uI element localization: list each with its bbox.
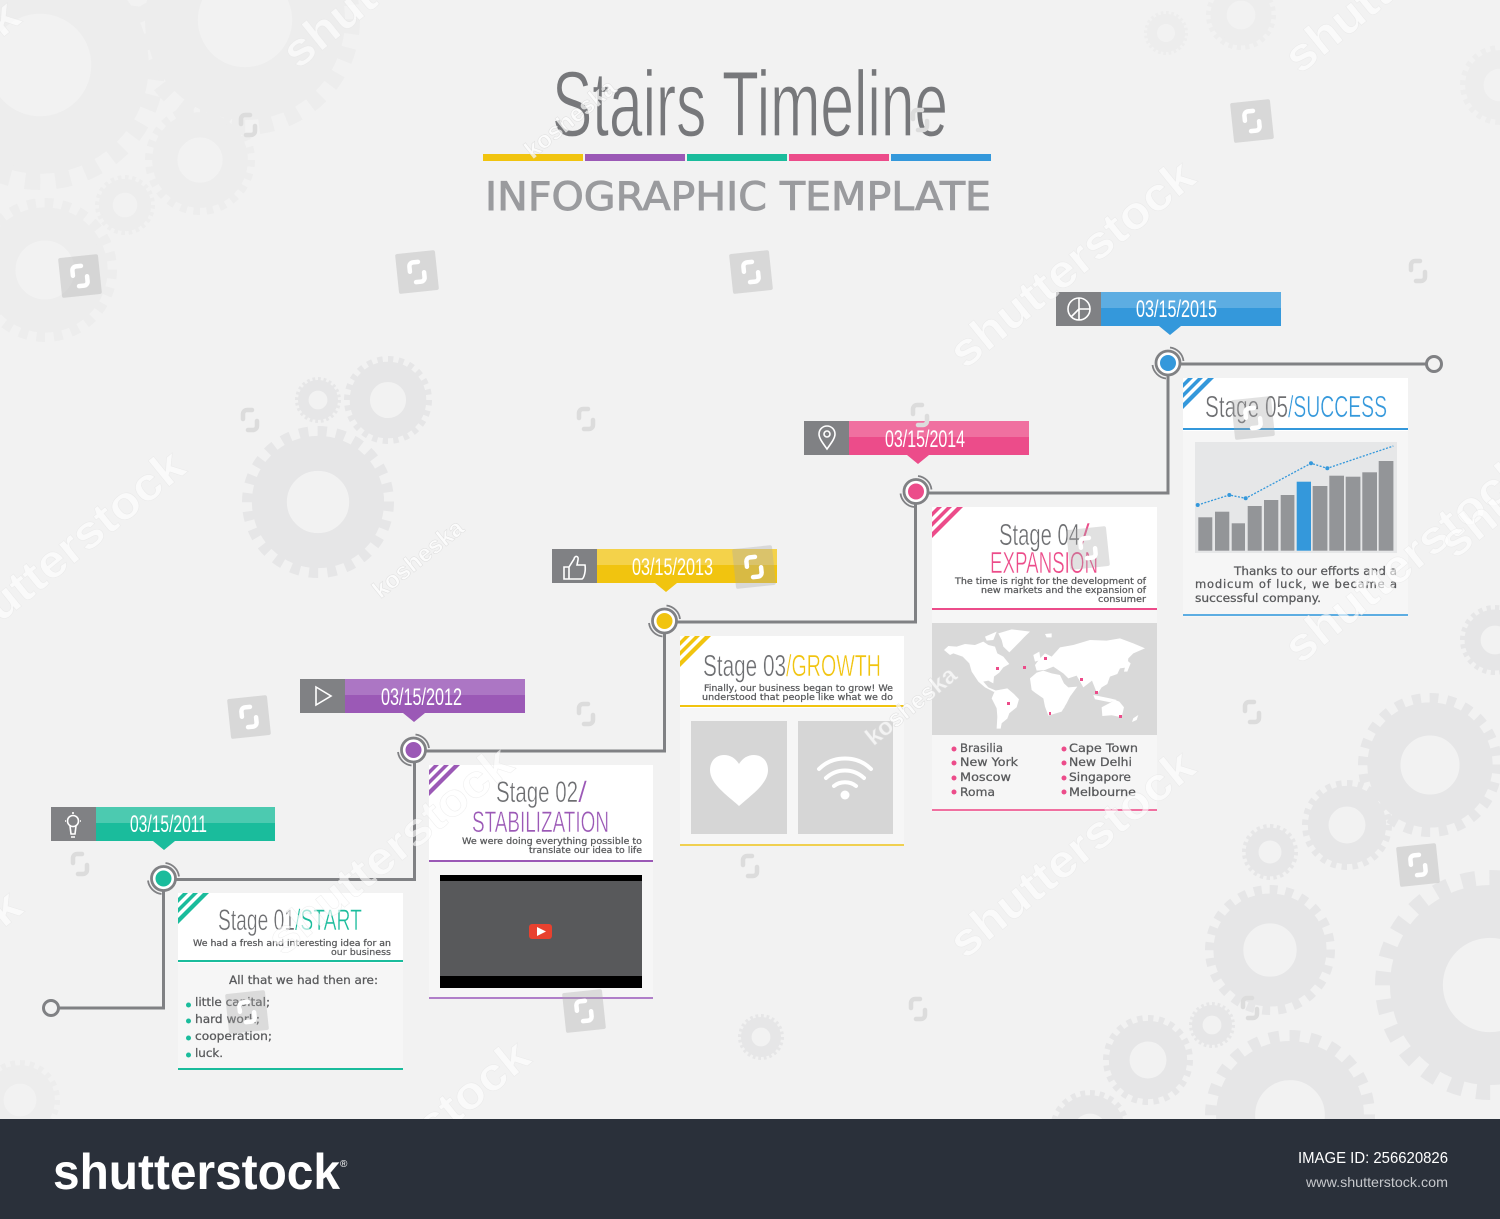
description <box>1195 564 1397 605</box>
date tag 2013: 03/15/2013 <box>632 554 713 581</box>
description: The time is right for the development of <box>954 577 1147 587</box>
description: successful company. <box>1195 591 1321 605</box>
description <box>193 939 391 958</box>
description: new markets and the expansion of <box>981 586 1147 596</box>
date tag 2015 <box>1056 292 1281 335</box>
icon: map pin <box>819 426 835 449</box>
date tag 2014 <box>804 421 1029 464</box>
description <box>462 837 643 856</box>
heading: /SUCCESS <box>1288 389 1387 424</box>
description <box>702 684 894 703</box>
stripes accent <box>178 893 209 924</box>
icon: pie chart <box>1068 298 1090 320</box>
description: Finally, our business began to grow! We <box>704 684 893 694</box>
description: modicum of luck, we became a <box>1195 577 1397 591</box>
icon: thumbs up <box>564 556 585 579</box>
stripes accent <box>932 507 963 538</box>
city list right: Singapore <box>1069 770 1131 784</box>
date tag 2011: 03/15/2011 <box>130 811 207 838</box>
date tag 2011 <box>51 807 275 850</box>
panel: stage 01 start <box>178 893 403 1070</box>
icon: play button <box>529 924 552 939</box>
title colour bar <box>483 154 991 161</box>
timeline node 2014 <box>900 476 932 507</box>
watermarks: shutterstock <box>257 735 523 965</box>
icon: light bulb <box>65 812 81 837</box>
title: Stairs Timeline <box>552 52 948 156</box>
description: consumer <box>1098 595 1146 605</box>
heading: / <box>578 776 588 809</box>
panel: stage 03 growth <box>680 636 904 846</box>
description: our business <box>331 948 391 958</box>
watermarks: kosheska <box>519 74 622 164</box>
city list right <box>1062 741 1138 799</box>
heading: Stage 03 <box>703 648 786 683</box>
watermarks: shutterstock <box>939 738 1205 968</box>
watermarks: kosheska <box>367 514 470 604</box>
bullet list: little capital; <box>195 995 270 1009</box>
city list right: Melbourne <box>1069 785 1136 799</box>
date tag 2012 <box>300 679 525 722</box>
date tag 2012: 03/15/2012 <box>381 684 462 711</box>
heading <box>990 517 1098 580</box>
heading: Stage 02 <box>496 776 578 809</box>
stair connector line <box>44 356 1442 1016</box>
site url: www.shutterstock.com <box>1305 1174 1448 1190</box>
heading: Stage 01 <box>218 904 295 937</box>
footer logo: shutterstock <box>53 1144 340 1200</box>
footer bar <box>0 1119 1500 1219</box>
heading <box>703 648 881 683</box>
timeline node 2011 <box>148 863 179 894</box>
timeline node 2012 <box>398 734 429 766</box>
description: translate our idea to life <box>529 846 642 856</box>
heading: / <box>1080 517 1090 552</box>
bullet list: cooperation; <box>195 1029 272 1043</box>
bullet list: luck. <box>195 1046 223 1060</box>
heading: /START <box>295 904 362 937</box>
video player <box>440 875 642 988</box>
city list left: New York <box>960 755 1018 769</box>
trend line <box>1196 446 1393 507</box>
watermarks: kosheska <box>860 661 963 751</box>
city list left: Brasilia <box>960 741 1003 755</box>
heading <box>472 776 609 839</box>
description: We were doing everything possible to <box>462 837 643 847</box>
description: We had a fresh and interesting idea for an <box>193 939 391 949</box>
panel: stage 05 success <box>1183 378 1408 617</box>
registered mark: ® <box>340 1159 348 1170</box>
watermarks: shutterstock <box>939 148 1205 378</box>
heading <box>1205 389 1387 424</box>
description <box>954 577 1147 605</box>
tile: heart <box>691 721 787 834</box>
city list left <box>952 741 1018 799</box>
date tag 2014: 03/15/2014 <box>885 426 965 453</box>
timeline node 2015 <box>1152 348 1184 378</box>
heading: EXPANSION <box>990 545 1098 580</box>
heading: STABILIZATION <box>472 806 609 839</box>
city list left: Roma <box>960 785 995 799</box>
panel: stage 04 expansion <box>932 507 1157 812</box>
heading: /GROWTH <box>786 648 881 683</box>
stripes accent <box>680 636 711 667</box>
intro text: All that we had then are: <box>229 973 378 987</box>
heading: Stage 04 <box>999 517 1080 552</box>
city list right: New Delhi <box>1069 755 1132 769</box>
stripes accent <box>429 765 460 796</box>
bar chart <box>1195 442 1397 553</box>
image id: IMAGE ID: 256620826 <box>1298 1150 1448 1167</box>
city list left: Moscow <box>960 770 1011 784</box>
description: Thanks to our efforts and a <box>1233 564 1397 578</box>
tile: wifi <box>798 721 893 834</box>
date tag 2013 <box>552 549 777 592</box>
stripes accent <box>1183 378 1214 409</box>
date tag 2015: 03/15/2015 <box>1136 296 1217 323</box>
timeline node 2013 <box>649 606 680 636</box>
heading: Stage 05 <box>1205 389 1288 424</box>
world map <box>932 623 1157 735</box>
map markers <box>996 657 1122 718</box>
bullet list: hard work; <box>195 1012 260 1026</box>
city list right: Cape Town <box>1069 741 1138 755</box>
icon: play <box>316 687 331 705</box>
subtitle: INFOGRAPHIC TEMPLATE <box>485 175 991 220</box>
panel: stage 02 stabilization <box>429 765 653 999</box>
bullet list <box>186 995 272 1060</box>
description: understood that people like what we do <box>702 693 894 703</box>
